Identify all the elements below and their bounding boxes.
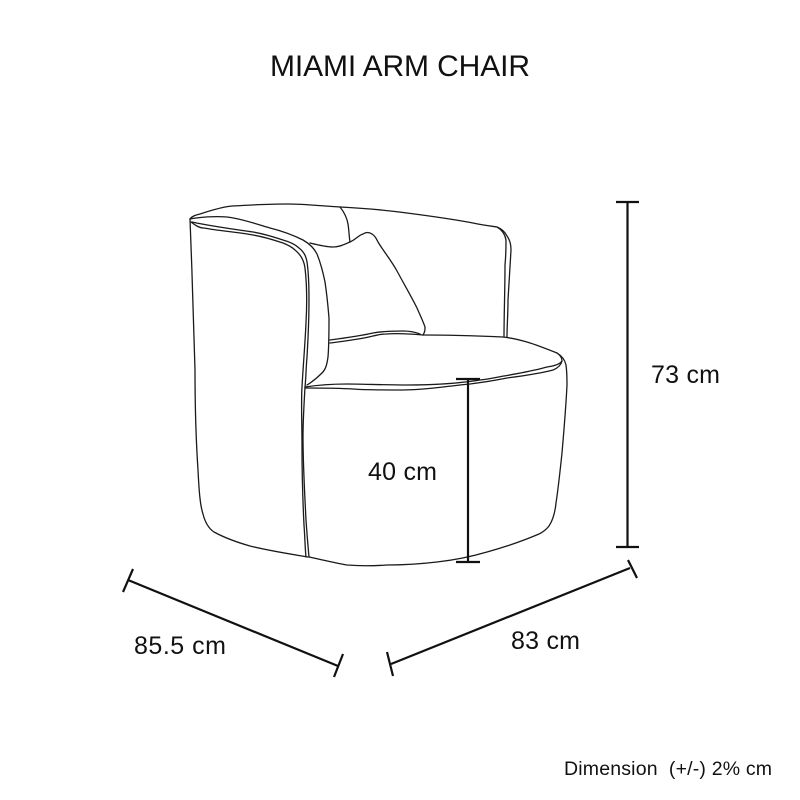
cushion xyxy=(363,232,425,335)
dimension: width xyxy=(387,560,637,676)
dimension: seat height: 40 cm xyxy=(368,458,437,486)
seat back line xyxy=(330,331,420,340)
back seam xyxy=(340,207,350,242)
tolerance note: Dimension (+/-) 2% cm xyxy=(564,758,772,780)
chair back top edge xyxy=(190,204,511,337)
dimension: overall height: 73 cm xyxy=(651,361,720,389)
chair outer left side xyxy=(190,219,308,557)
seat top outline xyxy=(305,335,562,387)
dimension: depth: 85.5 cm xyxy=(134,632,226,660)
dimension: depth xyxy=(123,569,343,677)
dimension: width: 83 cm xyxy=(511,627,580,655)
seat piping lower xyxy=(305,361,562,390)
arm piping line 2 xyxy=(192,222,309,557)
title: MIAMI ARM CHAIR xyxy=(270,50,530,83)
chair line drawing xyxy=(190,204,567,566)
arm outer piping xyxy=(190,217,329,385)
back lower edge behind cushion xyxy=(310,234,363,247)
arm piping line 3 xyxy=(191,222,307,557)
back right inner edge xyxy=(497,227,506,337)
seat base right side and bottom xyxy=(309,353,567,566)
